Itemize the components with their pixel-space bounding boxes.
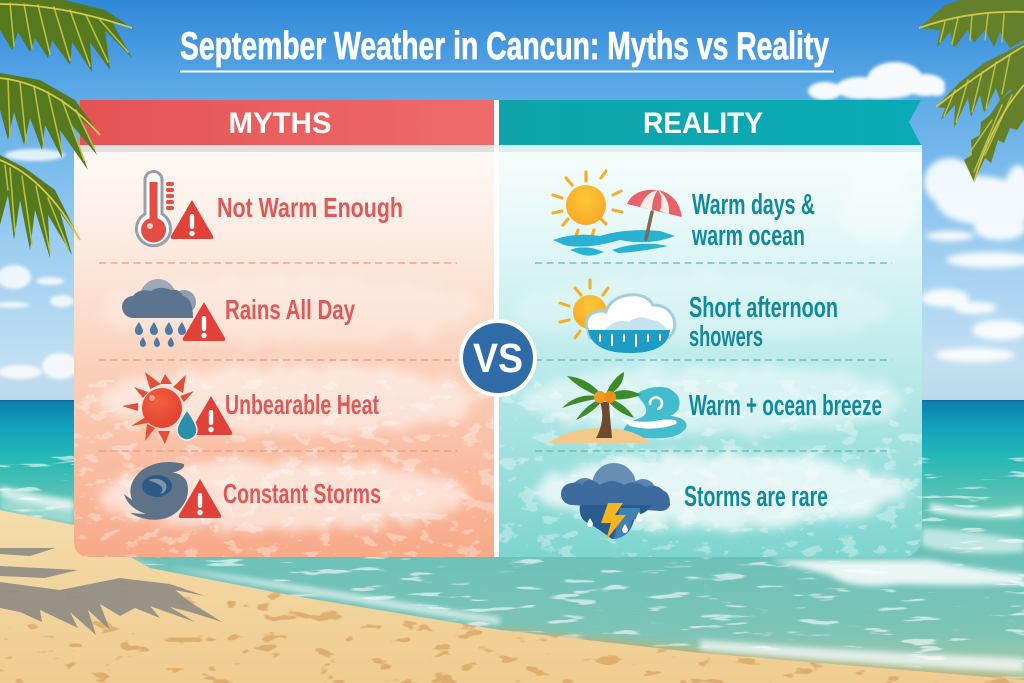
sea <box>0 400 1024 683</box>
label: Rains All Day <box>225 294 355 325</box>
icon: hot sun, drop and warning <box>122 372 232 444</box>
palm shadow on sand <box>0 548 222 635</box>
label <box>691 189 815 252</box>
label: Warm days & <box>692 189 815 221</box>
surf foam <box>0 455 1024 683</box>
reality row: short showers <box>560 280 838 353</box>
icon: hurricane with warning <box>124 462 221 520</box>
clouds <box>0 62 1024 379</box>
label: Not Warm Enough <box>217 192 403 223</box>
label: showers <box>689 321 763 353</box>
myth row: rains all day <box>122 279 355 347</box>
label <box>689 292 838 353</box>
label: warm ocean <box>691 220 805 252</box>
center divider <box>494 100 499 557</box>
sky <box>0 0 1024 402</box>
label: Warm + ocean breeze <box>689 390 882 422</box>
label: Short afternoon <box>689 292 838 324</box>
myth row: constant storms <box>124 462 381 520</box>
icon: palm island and wave <box>548 372 686 443</box>
reality row: ocean breeze <box>548 372 882 443</box>
myths header <box>74 100 494 152</box>
reality header: REALITY <box>643 107 763 140</box>
reality header <box>499 100 922 152</box>
palm fronds: top left <box>0 0 135 258</box>
reality painted wash bands <box>499 223 922 557</box>
myths panel body <box>74 145 494 557</box>
panel: reality <box>499 100 922 557</box>
myths header: MYTHS <box>228 107 332 140</box>
label: Constant Storms <box>223 478 381 509</box>
myths painted wash bands <box>74 276 494 557</box>
icon: sun, umbrella and waves <box>553 171 682 256</box>
icon: storm cloud with lightning <box>561 463 670 540</box>
label: Unbearable Heat <box>225 389 379 420</box>
vs badge: VS <box>473 335 523 381</box>
icon: rain cloud with warning <box>122 279 225 347</box>
myth row: unbearable heat <box>122 372 379 444</box>
icon: thermometer with warning <box>136 172 213 246</box>
myth row: not warm enough <box>136 172 403 246</box>
icon: sun, cloud and shower <box>560 280 675 353</box>
panel: myths <box>74 100 494 557</box>
row dividers <box>99 263 892 451</box>
sand <box>0 510 1024 683</box>
reality row: warm days <box>553 171 815 256</box>
label: Storms are rare <box>684 481 828 513</box>
vs badge <box>459 319 537 397</box>
reality row: storms rare <box>561 463 828 540</box>
reality panel body <box>499 145 922 557</box>
palm fronds: top right <box>919 0 1024 182</box>
